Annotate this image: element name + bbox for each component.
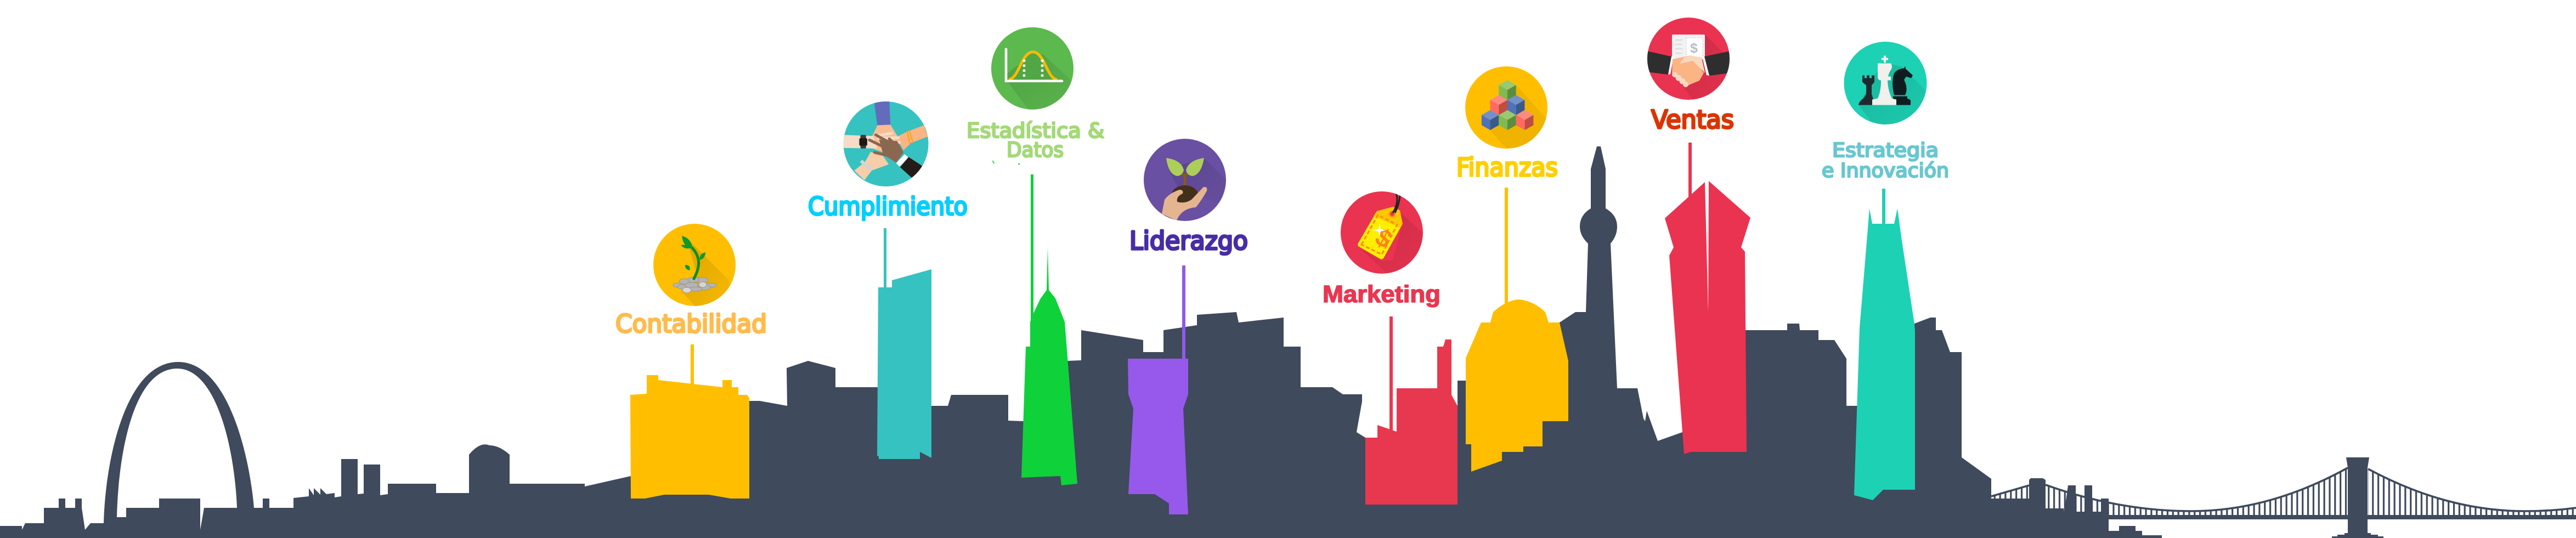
city skyline silhouette — [0, 146, 2162, 538]
label: cumplimiento: Cumplimiento — [808, 192, 968, 221]
group: finanzas — [1456, 66, 1568, 472]
building: contabilidad — [630, 375, 749, 499]
group: ventas — [1647, 18, 1750, 454]
group: marketing — [1323, 191, 1458, 505]
group: cumplimiento — [808, 100, 968, 459]
label: estrategia e innovacion — [1822, 139, 1949, 182]
group: estrategia e innovacion — [1822, 42, 1949, 500]
icon: sprout on coins — [653, 224, 736, 306]
icon: handshake — [1647, 18, 1732, 105]
label: ventas: Ventas — [1651, 105, 1734, 134]
label: contabilidad: Contabilidad — [615, 309, 767, 338]
label: finanzas: Finanzas — [1456, 152, 1558, 182]
icon: chess pieces — [1844, 42, 1929, 129]
building: cumplimiento — [877, 269, 931, 459]
icon: price tag — [1341, 191, 1426, 279]
building: ventas — [1665, 181, 1750, 454]
label: marketing: Marketing — [1323, 281, 1440, 308]
connector line: marketing — [1389, 316, 1393, 432]
label: estrategia e innovacion: Estrategia — [1832, 139, 1939, 162]
label: estadistica y datos: Datos — [1007, 138, 1064, 162]
icon: handshake: $ — [1690, 41, 1698, 56]
label: estadistica y datos: Estadística & — [967, 119, 1104, 143]
icon: stacked hands — [844, 100, 928, 186]
icon: price tag: $ — [1371, 222, 1397, 254]
connector line: estadistica — [1031, 174, 1033, 348]
building: marketing — [1365, 339, 1458, 505]
connector line: estrategia — [1882, 189, 1885, 225]
group: contabilidad — [615, 224, 767, 499]
icon: bell curve — [991, 27, 1076, 111]
specks under datos — [992, 160, 1020, 165]
connector line: ventas — [1688, 143, 1692, 197]
label: estrategia e innovacion: e Innovación — [1822, 160, 1949, 182]
suspension bridge — [1991, 457, 2576, 538]
connector line: finanzas — [1505, 188, 1508, 304]
connector line: contabilidad — [691, 344, 694, 386]
building: estadistica — [1021, 247, 1077, 485]
connector line: liderazgo — [1182, 265, 1185, 360]
icon: cube pyramid — [1465, 66, 1550, 151]
icon: plant in hand — [1144, 139, 1229, 221]
building: estrategia — [1854, 208, 1915, 500]
label: estadistica y datos — [967, 119, 1104, 162]
group: estadistica y datos — [967, 27, 1104, 485]
building: finanzas — [1466, 299, 1568, 472]
building: liderazgo — [1128, 359, 1188, 514]
connector line: cumplimiento — [884, 228, 886, 288]
label: liderazgo: Liderazgo — [1129, 226, 1248, 256]
group: liderazgo — [1128, 139, 1248, 514]
